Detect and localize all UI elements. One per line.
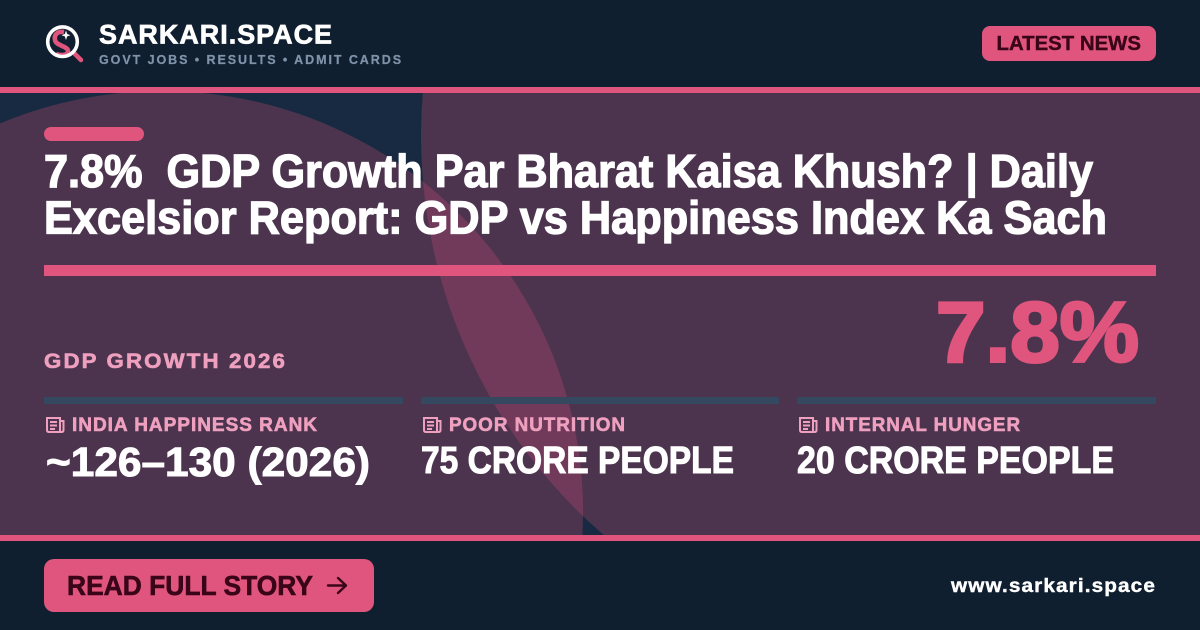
stat: internal hunger [797, 397, 1156, 482]
hero label: GDP GROWTH 2026 [44, 350, 287, 373]
background panel [0, 93, 1200, 535]
stat: poor nutrition: POOR NUTRITION [449, 414, 626, 436]
website url: www.sarkari.space [950, 576, 1156, 597]
badge: latest news: LATEST NEWS [996, 33, 1141, 55]
footer band [0, 535, 1200, 630]
accent pill [44, 127, 144, 141]
brand name: SARKARI.SPACE [99, 20, 333, 50]
title: Excelsior Report: GDP vs Happiness Index Ka Sach [44, 192, 1107, 244]
button: read full story [44, 559, 374, 612]
stat: internal hunger: INTERNAL HUNGER [825, 414, 1021, 436]
stat: poor nutrition [421, 397, 779, 482]
icon: newspaper [424, 418, 440, 432]
stat: india happiness rank: INDIA HAPPINESS RANK [72, 414, 318, 436]
button: read full story: READ FULL STORY [67, 570, 313, 601]
title: 7.8% GDP Growth Par Bharat Kaisa Khush? | Daily [44, 145, 1093, 197]
title rule [44, 265, 1156, 276]
icon: newspaper [47, 418, 64, 432]
title [44, 145, 1107, 244]
icon: arrow [328, 578, 346, 593]
stat: india happiness rank [44, 397, 403, 485]
header band [0, 0, 1200, 93]
stat: india happiness rank: ~126–130 (2026) [46, 439, 370, 485]
stat: poor nutrition: 75 CRORE PEOPLE [421, 440, 734, 482]
badge: latest news [982, 26, 1156, 61]
stat: internal hunger: 20 CRORE PEOPLE [797, 440, 1114, 482]
hero number: 7.8% [936, 286, 1139, 380]
tagline: GOVT JOBS • RESULTS • ADMIT CARDS [99, 52, 403, 67]
logo icon: magnifier with S [48, 27, 81, 60]
icon: newspaper [800, 418, 816, 432]
